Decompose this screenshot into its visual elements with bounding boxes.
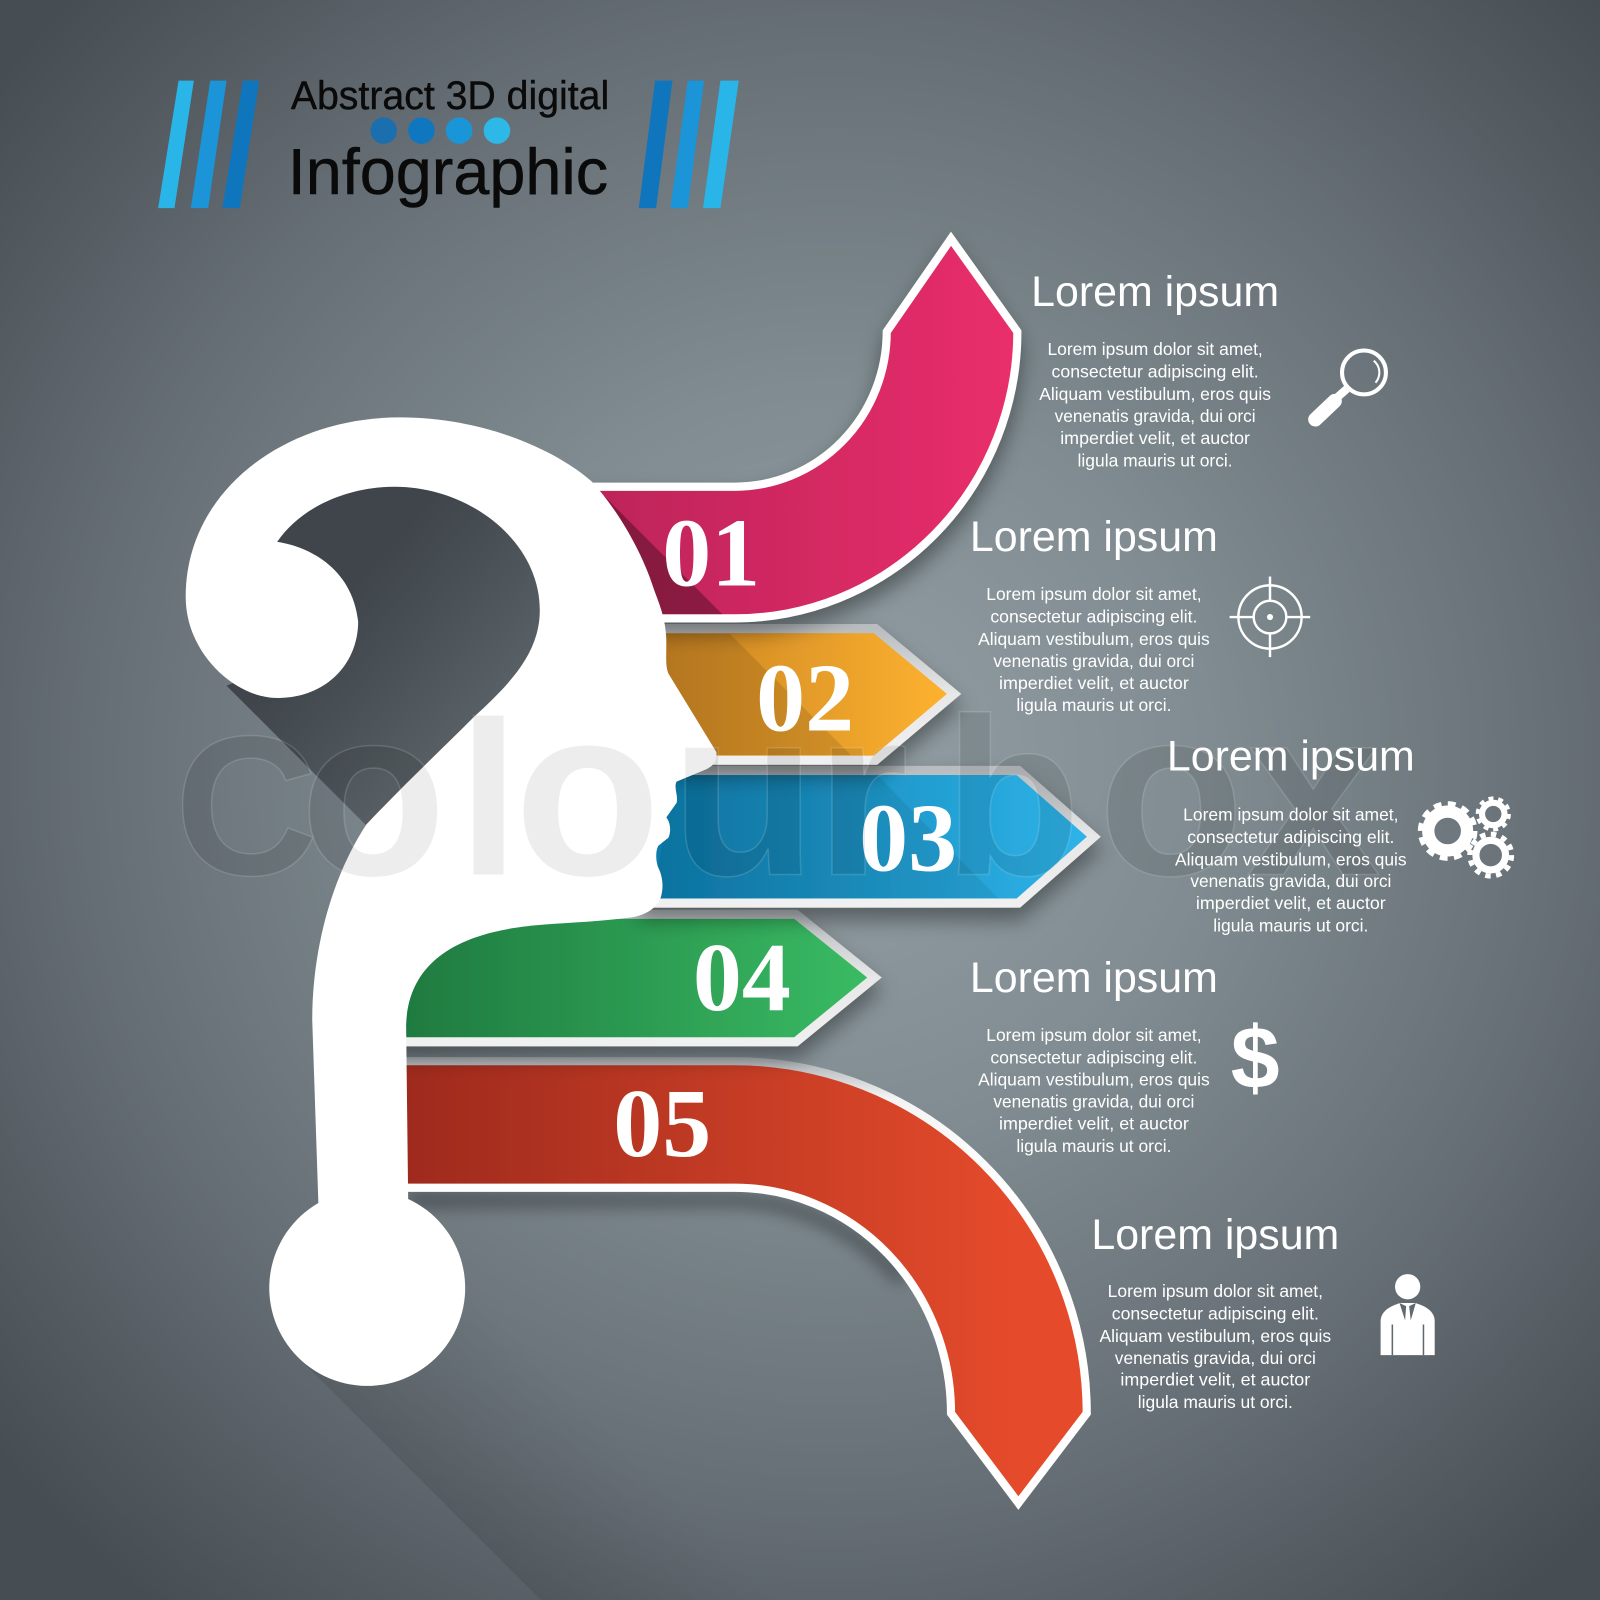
body 5: ligula mauris ut orci. — [1138, 1392, 1293, 1412]
banner 02 orange — [653, 629, 954, 760]
body 3: Aliquam vestibulum, eros quis — [1175, 849, 1407, 869]
watermark: o — [514, 657, 661, 925]
banner 01 face shadow — [600, 492, 722, 614]
body 3: imperdiet velit, et auctor — [1196, 893, 1386, 913]
title line two: Infographic — [288, 135, 608, 208]
banner 02 shape — [653, 629, 954, 760]
banner 05 number: 05 — [613, 1070, 711, 1178]
text block 5 — [1091, 1211, 1339, 1412]
watermark: o — [1098, 657, 1244, 925]
heading 5: Lorem ipsum — [1091, 1211, 1339, 1259]
body 2: ligula mauris ut orci. — [1016, 695, 1171, 715]
banner 05 red — [393, 1061, 1087, 1503]
watermark: r — [815, 657, 909, 925]
heading 4: Lorem ipsum — [970, 954, 1218, 1002]
body 5: Aliquam vestibulum, eros quis — [1099, 1326, 1331, 1346]
text block 4 — [970, 954, 1218, 1156]
text block 3 — [1167, 732, 1415, 936]
heading 3: Lorem ipsum — [1167, 732, 1415, 780]
banner 02 face shadow — [666, 634, 851, 755]
icon: gears — [1421, 798, 1512, 876]
body 1: consectetur adipiscing elit. — [1052, 362, 1259, 382]
banner 03 number: 03 — [859, 784, 957, 892]
body 2: Lorem ipsum dolor sit amet, — [986, 584, 1202, 604]
body 5 — [1099, 1281, 1331, 1412]
icon: magnifier — [1315, 351, 1386, 419]
watermark over head: l — [458, 676, 519, 921]
body 2: venenatis gravida, dui orci — [993, 651, 1194, 671]
heading 2: Lorem ipsum — [970, 513, 1218, 561]
watermark over head: o — [300, 657, 446, 925]
watermark: l — [458, 676, 519, 921]
icon: person — [1381, 1274, 1435, 1355]
watermark over head: o — [514, 657, 661, 925]
question mark head silhouette — [186, 417, 717, 1386]
title dots — [370, 117, 510, 144]
watermark: x — [1247, 657, 1380, 925]
body 2: imperdiet velit, et auctor — [999, 673, 1189, 693]
body 5: consectetur adipiscing elit. — [1112, 1303, 1319, 1323]
watermark over head: r — [815, 657, 909, 925]
body 3 — [1175, 804, 1407, 936]
body 3: ligula mauris ut orci. — [1213, 916, 1368, 936]
body 3: venenatis gravida, dui orci — [1190, 871, 1391, 891]
text block 1 — [1031, 268, 1279, 470]
body 3: Lorem ipsum dolor sit amet, — [1183, 804, 1398, 824]
watermark: C — [174, 695, 318, 917]
body 2: Aliquam vestibulum, eros quis — [978, 629, 1210, 649]
body 1: Lorem ipsum dolor sit amet, — [1047, 339, 1263, 359]
body 3: consectetur adipiscing elit. — [1187, 827, 1394, 847]
body 4 — [978, 1025, 1210, 1156]
left stripes — [158, 81, 259, 208]
banner 01 pink — [587, 239, 1017, 618]
banner 03 face shadow — [653, 776, 998, 898]
watermark over head: u — [670, 657, 817, 925]
banner 01 number: 01 — [662, 500, 760, 608]
banner 02 number: 02 — [756, 645, 854, 753]
long shadow of the dot — [298, 1219, 816, 1600]
watermark over head: x — [1247, 657, 1380, 925]
watermark: b — [944, 671, 1081, 922]
watermark: u — [670, 657, 817, 925]
watermark: o — [300, 657, 446, 925]
body 1 — [1039, 339, 1271, 470]
heading 1: Lorem ipsum — [1031, 268, 1279, 316]
body 5: Lorem ipsum dolor sit amet, — [1108, 1281, 1323, 1301]
body 5: venenatis gravida, dui orci — [1115, 1348, 1316, 1368]
title block — [158, 74, 739, 208]
body 4: consectetur adipiscing elit. — [990, 1047, 1197, 1067]
body 5: imperdiet velit, et auctor — [1120, 1370, 1310, 1390]
body 2: consectetur adipiscing elit. — [990, 606, 1197, 626]
watermark over head: b — [944, 671, 1081, 922]
banner 05 shape — [393, 1061, 1087, 1503]
icon: target — [1230, 577, 1310, 657]
body 1: venenatis gravida, dui orci — [1055, 406, 1256, 426]
hook shadow inside the question mark — [227, 459, 571, 832]
body 1: ligula mauris ut orci. — [1078, 450, 1233, 470]
body 1: imperdiet velit, et auctor — [1060, 428, 1250, 448]
body 4: Lorem ipsum dolor sit amet, — [986, 1025, 1202, 1045]
banner 05 shadow — [408, 1200, 903, 1281]
text block 2 — [970, 513, 1218, 715]
banner 03 shape — [643, 770, 1094, 903]
body 1: Aliquam vestibulum, eros quis — [1039, 384, 1271, 404]
body 2 — [978, 584, 1210, 715]
right stripes — [639, 81, 739, 208]
body 4: venenatis gravida, dui orci — [993, 1092, 1194, 1112]
body 4: Aliquam vestibulum, eros quis — [978, 1070, 1210, 1090]
banner 04 number: 04 — [693, 924, 791, 1032]
banner 04 green — [388, 914, 874, 1042]
banner 04 shape — [388, 914, 874, 1042]
body 4: imperdiet velit, et auctor — [999, 1114, 1189, 1134]
watermark over head: C — [174, 695, 318, 917]
watermark over head: o — [1098, 657, 1244, 925]
title line one: Abstract 3D digital — [291, 74, 609, 118]
body 4: ligula mauris ut orci. — [1016, 1136, 1171, 1156]
banner 01 shape — [587, 239, 1017, 618]
banner 03 blue — [643, 770, 1094, 903]
icon: dollar: $ — [1231, 1009, 1280, 1107]
